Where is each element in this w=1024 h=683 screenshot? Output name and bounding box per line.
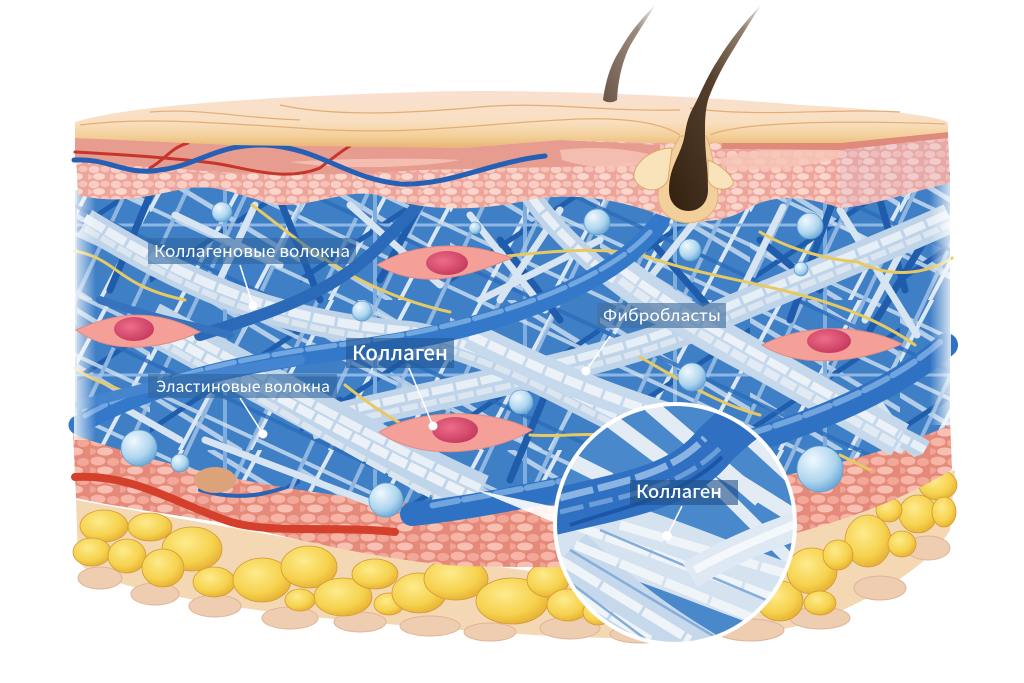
lower pink connective layer: [73, 418, 952, 567]
dermis background: [75, 172, 950, 507]
callout pointer wedge: [476, 490, 560, 522]
label: Коллаген center: Коллаген: [352, 337, 448, 366]
magnifier circle: [553, 402, 797, 643]
fat layer: [73, 470, 957, 643]
fat yellow lobules: [73, 470, 957, 625]
white collagen bundles: [85, 195, 950, 505]
hair thick with bulb: [669, 5, 761, 211]
cell left: [76, 315, 200, 347]
fat pale outer lobules: [78, 536, 950, 643]
label: Коллагеновые волокна: Коллагеновые волокна: [154, 238, 350, 262]
label: Эластиновые волокна: [148, 374, 337, 438]
label: Коллаген in magnifier: [630, 478, 738, 541]
cell top centre: [377, 246, 512, 279]
fibroblast cells: [76, 246, 902, 452]
dermis edge fade right: [930, 175, 951, 425]
label: Коллагеновые волокна: [148, 238, 356, 310]
skin surface stratum corneum: [75, 91, 948, 148]
blue blood vessel upper: [74, 145, 545, 184]
red blood vessel: [75, 477, 395, 532]
leader line: [662, 506, 682, 541]
magnified blue collagen bundle: [557, 413, 757, 535]
darker dermal strip: [75, 138, 660, 174]
pale lozenges strip: [290, 147, 844, 170]
leader line: [240, 398, 268, 438]
dermis blue fibre layer: [74, 172, 952, 514]
label: Коллаген center: [346, 337, 454, 430]
fat backing tissue: [76, 470, 955, 638]
label: Фибробласты: Фибробласты: [603, 302, 721, 326]
follicle and sebaceous glands: [634, 136, 733, 223]
right dermal strip: [722, 132, 948, 150]
magnified white collagen bundle: [558, 512, 793, 642]
blue collagen bundles: [78, 205, 946, 514]
label: Эластиновые волокна: Эластиновые волокна: [156, 375, 330, 397]
elastin yellow fibres: [75, 205, 952, 470]
leader line: [240, 265, 258, 310]
blue blood vessel: [200, 474, 366, 496]
upper pink epidermis layer: [74, 132, 950, 221]
leader line: [409, 368, 438, 430]
surface creases: [80, 105, 945, 135]
tan cell near vessel: [194, 467, 236, 493]
mesh of fine fibres, layer one: [75, 172, 950, 507]
dermis edge fade left: [74, 190, 96, 440]
leader line: [582, 336, 610, 376]
label: Фибробласты: [582, 302, 726, 376]
cell right: [762, 329, 902, 361]
right facet shade: [840, 132, 950, 208]
fine background fibres: [110, 195, 925, 510]
cell lower centre: [379, 414, 532, 452]
label: Коллаген in magnifier: Коллаген: [636, 478, 722, 504]
hair thin left: [603, 5, 655, 102]
water bubbles: [121, 202, 843, 517]
red blood vessel upper: [75, 143, 350, 174]
mesh of fine fibres, layer two: [75, 172, 950, 507]
magnified background fibres: [570, 406, 792, 517]
